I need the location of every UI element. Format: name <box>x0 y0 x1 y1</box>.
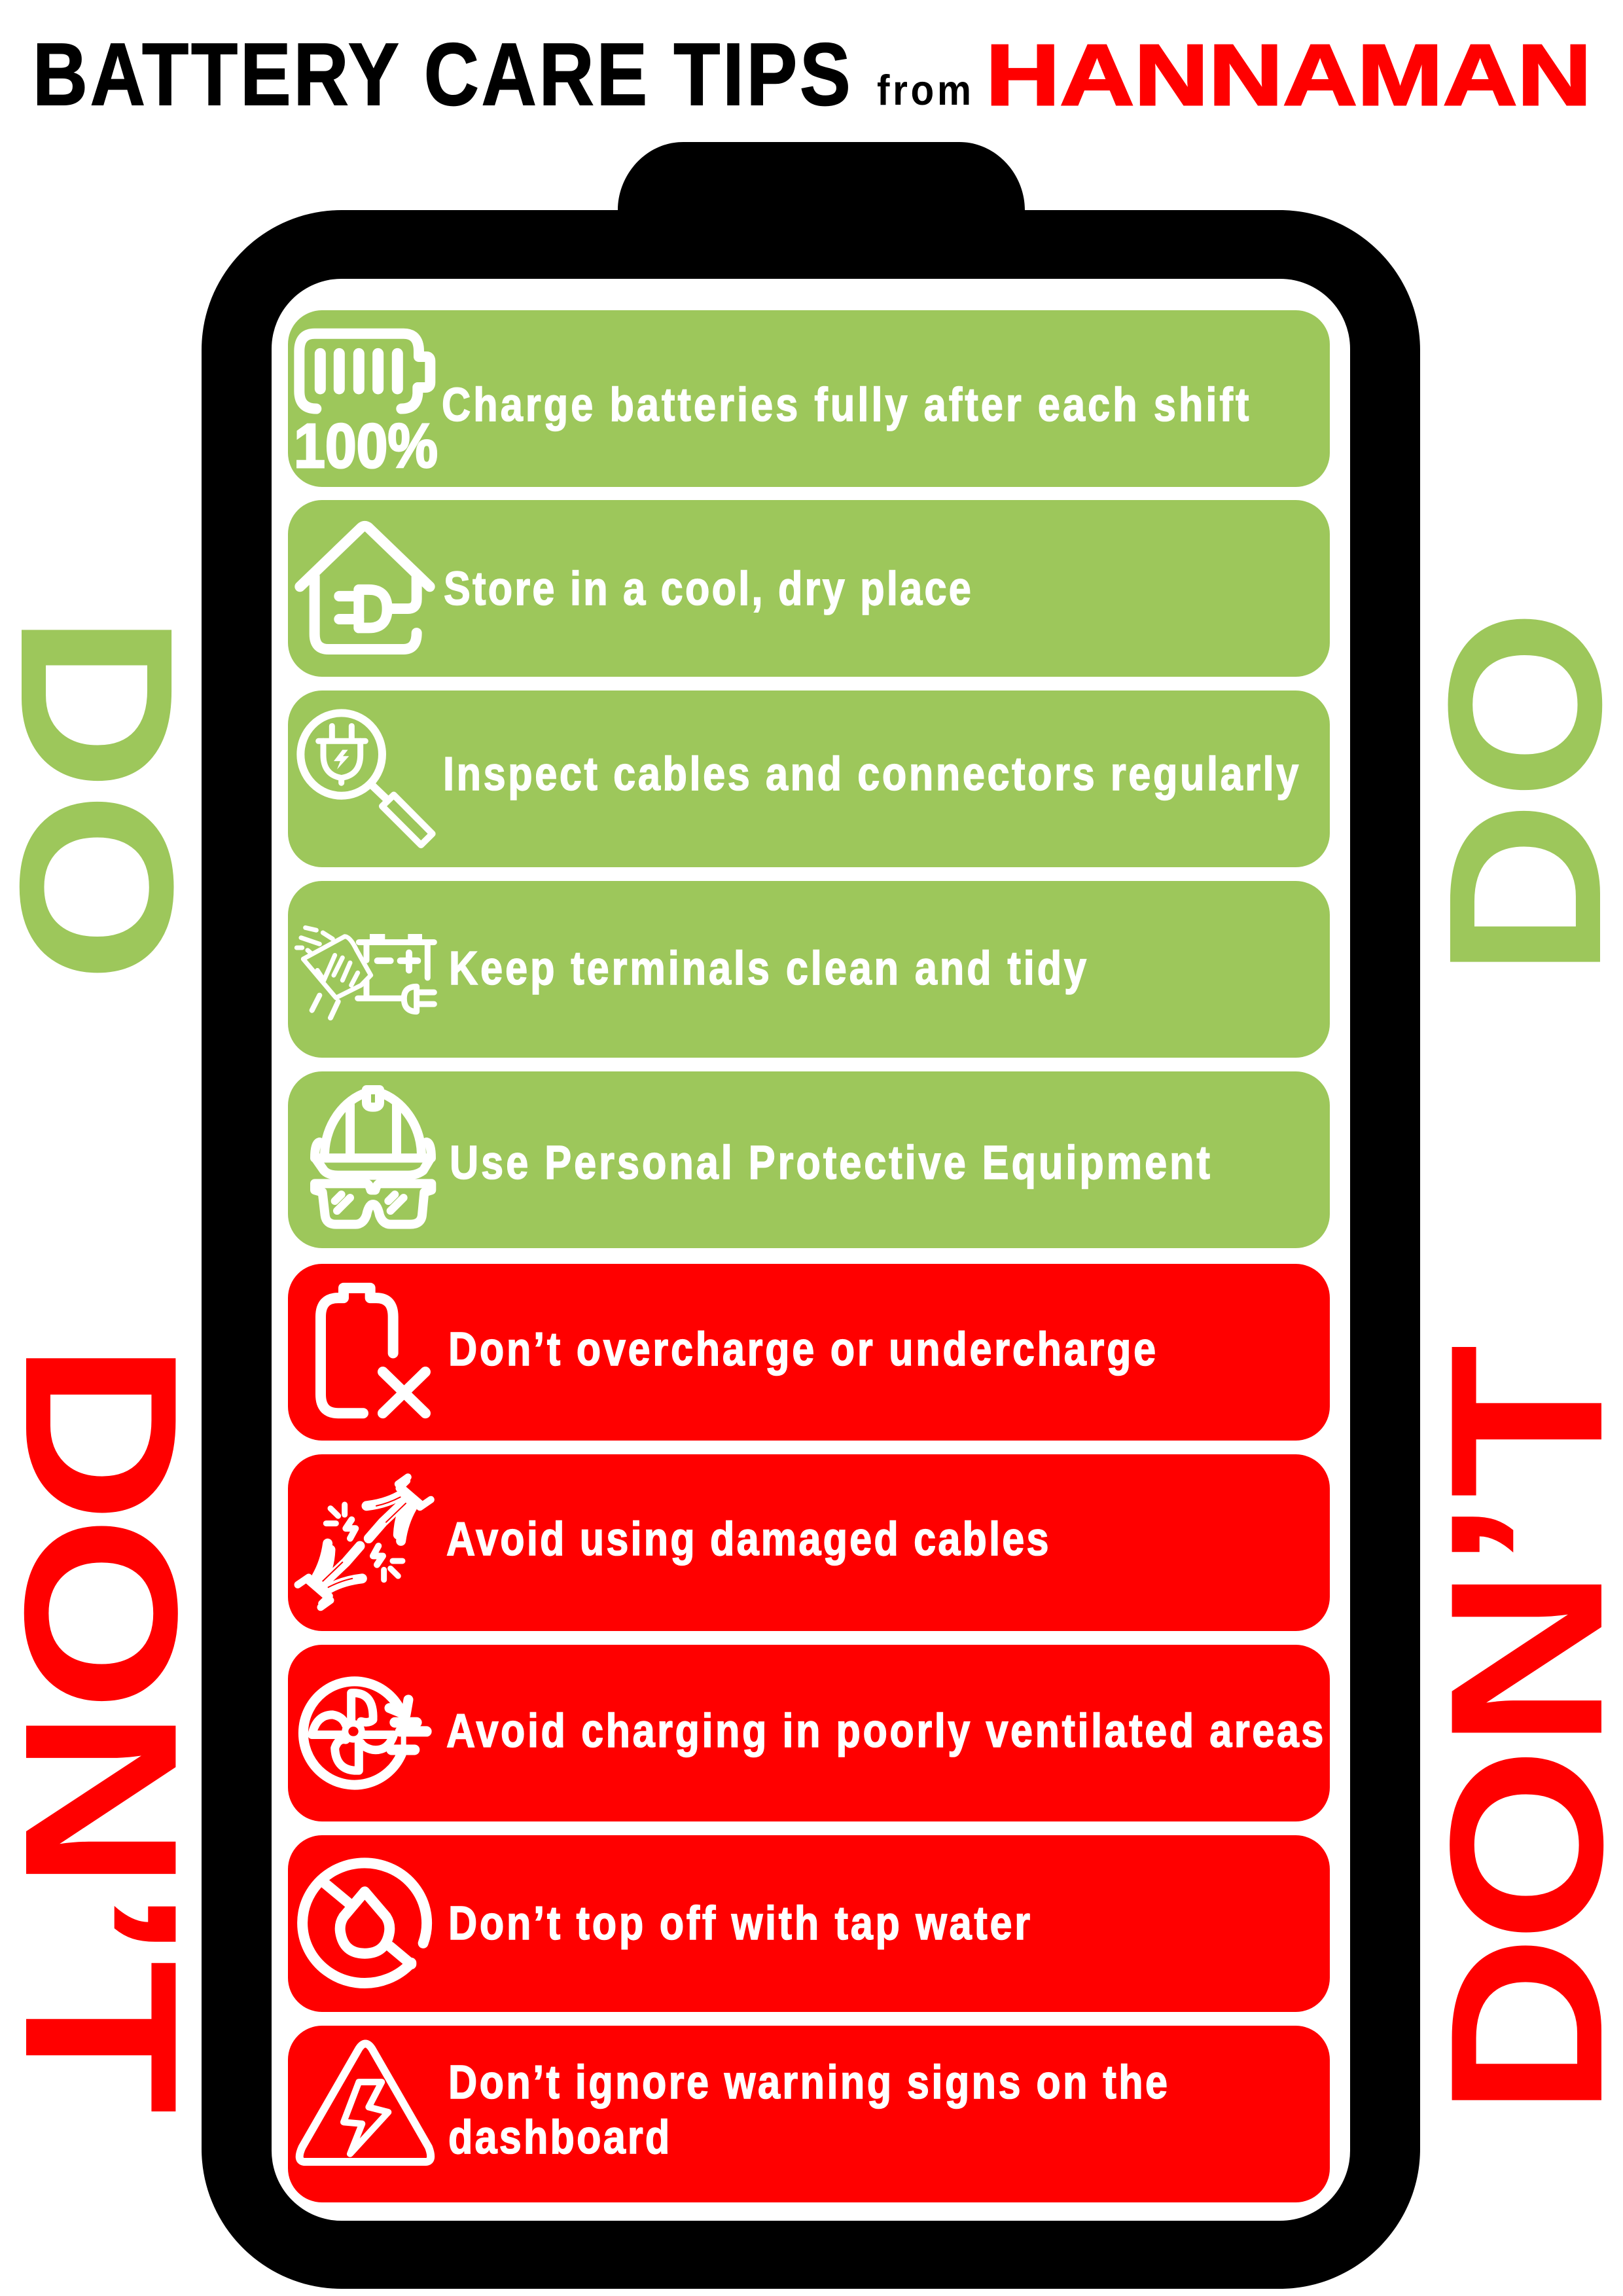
panel: do 2 store cool dry <box>288 500 1330 677</box>
icon: crossed water drop <box>302 1863 427 1983</box>
text: Keep terminals clean and tidy <box>449 942 1086 995</box>
text: Charge batteries fully after each shift <box>442 379 1249 431</box>
text: Avoid charging in poorly ventilated areas <box>446 1705 1323 1757</box>
icon: broken cable with sparks <box>298 1477 431 1607</box>
text: Don’t overcharge or undercharge <box>448 1323 1156 1376</box>
panel: do 4 keep terminals clean <box>288 881 1330 1058</box>
text <box>448 2056 1168 2164</box>
icon: house with plug <box>300 526 430 649</box>
title: HANNAMAN <box>986 27 1592 123</box>
text: Use Personal Protective Equipment <box>450 1137 1210 1189</box>
icon: battery with cross <box>321 1288 425 1413</box>
icon: full battery 100% <box>294 334 438 481</box>
text: Don’t ignore warning signs on the <box>448 2056 1168 2109</box>
panel: don't 4 tap water <box>288 1835 1330 2012</box>
icon: fan with air <box>303 1681 427 1785</box>
text: Avoid using damaged cables <box>446 1513 1049 1566</box>
title <box>33 25 1592 124</box>
panel: don't 1 overcharge <box>288 1264 1330 1441</box>
panel: do 1 charge fully <box>288 310 1330 487</box>
text: Don’t top off with tap water <box>448 1897 1030 1950</box>
text: Inspect cables and connectors regularly <box>443 748 1298 800</box>
panel: do 5 PPE <box>288 1071 1330 1248</box>
battery body <box>202 142 1420 2289</box>
icon: hand wiping battery <box>296 927 434 1018</box>
text: Store in a cool, dry place <box>444 563 971 615</box>
icon: magnifier over plug <box>300 713 433 845</box>
icon: helmet and goggles <box>315 1090 431 1225</box>
title: BATTERY CARE TIPS <box>33 25 851 124</box>
panel: don't 5 warning signs <box>288 2026 1330 2202</box>
panel: do 3 inspect cables <box>288 691 1330 867</box>
panel: don't 3 ventilation <box>288 1645 1330 1821</box>
icon: warning triangle with bolt <box>300 2043 431 2162</box>
title: from <box>877 67 971 115</box>
text: dashboard <box>448 2111 669 2164</box>
icon: full battery 100%: 100% <box>294 411 438 481</box>
panel: don't 2 damaged cables <box>288 1454 1330 1631</box>
